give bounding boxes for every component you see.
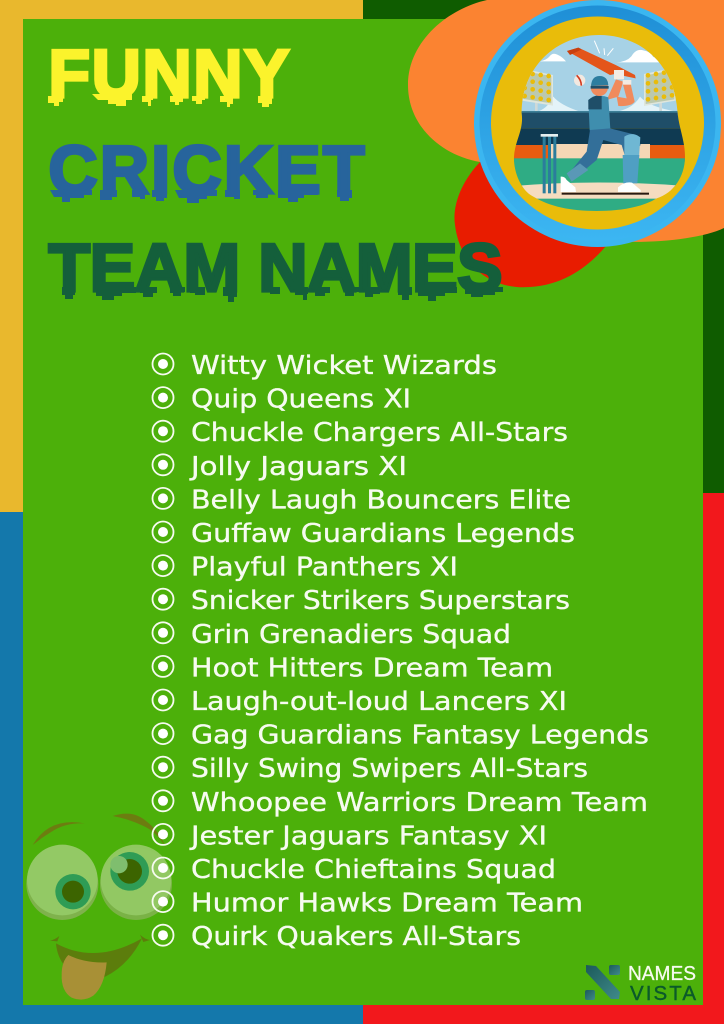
names: Jolly Jaguars XI <box>189 452 407 482</box>
clouds <box>540 50 664 62</box>
tongue <box>62 955 107 1000</box>
wickets <box>541 134 558 193</box>
ball <box>574 75 585 86</box>
bat <box>567 48 636 78</box>
names: Playful Panthers XI <box>191 553 458 583</box>
cricket badge <box>474 0 721 247</box>
stand <box>520 112 680 128</box>
badge yellow disc <box>491 16 704 230</box>
batsman scene <box>514 35 685 211</box>
names: Snicker Strikers Superstars <box>191 586 570 616</box>
names: Grin Grenadiers Squad <box>191 620 511 650</box>
names: Guffaw Guardians Legends <box>191 519 575 549</box>
logo: Names Vista: VISTA <box>630 982 696 1005</box>
floodlights <box>535 102 662 111</box>
right eye <box>100 845 172 920</box>
left eye <box>26 845 98 920</box>
names: Gag Guardians Fantasy Legends <box>191 721 649 751</box>
eyebrows <box>33 814 166 848</box>
badge ring <box>474 0 721 247</box>
names: Chuckle Chieftains Squad <box>191 855 556 885</box>
names: Chuckle Chargers All-Stars <box>191 418 568 448</box>
title line: TEAM NAMES: TEAM NAMES <box>48 230 502 306</box>
names: Quirk Quakers All-Stars <box>191 922 521 952</box>
title <box>48 36 503 306</box>
names <box>189 351 649 952</box>
red blob <box>454 160 606 287</box>
icon: silly face <box>26 814 172 1000</box>
batsman <box>561 70 641 192</box>
mouth <box>56 938 142 977</box>
logo mark <box>585 965 620 1000</box>
bullets <box>152 354 174 946</box>
impact marks <box>594 41 613 56</box>
team names list <box>152 351 649 952</box>
names: Belly Laugh Bouncers Elite <box>191 485 571 515</box>
title line: CRICKET: CRICKET <box>48 132 364 208</box>
logo: Names Vista <box>585 962 696 1005</box>
names: Quip Queens XI <box>191 385 411 415</box>
orange blob <box>408 0 724 242</box>
logo wordmark: NAMES <box>628 962 696 985</box>
names: Hoot Hitters Dream Team <box>191 653 553 683</box>
names: Witty Wicket Wizards <box>191 351 497 381</box>
outfield bands <box>507 145 693 162</box>
names: Humor Hawks Dream Team <box>191 889 583 919</box>
names: Silly Swing Swipers All-Stars <box>191 754 588 784</box>
names: Jester Jaguars Fantasy XI <box>189 821 547 851</box>
title line: FUNNY: FUNNY <box>48 36 290 112</box>
names: Laugh-out-loud Lancers XI <box>191 687 567 717</box>
names: Whoopee Warriors Dream Team <box>191 788 648 818</box>
